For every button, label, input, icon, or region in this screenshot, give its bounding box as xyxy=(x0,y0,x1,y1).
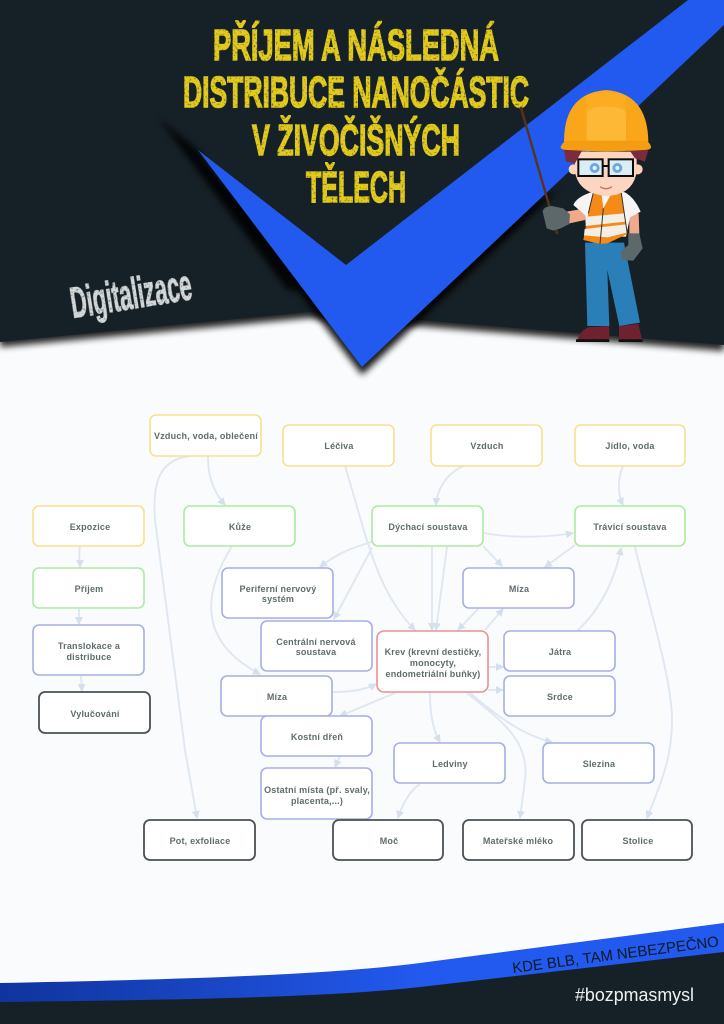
node: Míza upper xyxy=(463,568,574,608)
title xyxy=(183,20,529,212)
node: Krev: endometriální buňky) xyxy=(385,669,481,679)
node: Krev: monocyty, xyxy=(410,658,456,668)
node: Trávicí soustava: Trávicí soustava xyxy=(593,522,667,532)
character: worker with pointer xyxy=(521,90,651,342)
node: Periferní nervový systém: systém xyxy=(262,594,294,604)
node: Centrální nervová soustava: Centrální nervová xyxy=(276,637,357,647)
node: Moč: Moč xyxy=(380,836,398,846)
node: Expozice xyxy=(33,506,144,546)
node: Periferní nervový systém: Periferní nervový xyxy=(240,584,316,594)
node: Jídlo, voda: Jídlo, voda xyxy=(605,441,655,451)
node: Vzduch: Vzduch xyxy=(470,441,504,451)
title: V ŽIVOČIŠNÝCH xyxy=(252,114,460,165)
node: Ostatní místa xyxy=(261,768,372,819)
node: Míza upper: Míza xyxy=(509,584,530,594)
node: Vzduch xyxy=(431,425,542,466)
node: Slezina: Slezina xyxy=(583,759,616,769)
title: PŘÍJEM A NÁSLEDNÁ xyxy=(213,20,499,70)
boots xyxy=(577,324,642,341)
node: Translokace a distribuce xyxy=(33,625,144,675)
node: Ledviny: Ledviny xyxy=(432,759,468,769)
footer band xyxy=(0,923,724,1024)
node: Míza lower: Míza xyxy=(267,692,288,702)
node: Příjem: Příjem xyxy=(75,584,103,594)
node: Kostní dřeň: Kostní dřeň xyxy=(291,732,343,742)
vest xyxy=(583,191,627,244)
arms xyxy=(567,208,585,224)
node: Srdce xyxy=(504,676,615,716)
slogan: KDE BLB, TAM NEBEZPEČNO xyxy=(511,933,720,977)
hair xyxy=(564,148,648,163)
shirt xyxy=(573,191,641,237)
node: Míza lower xyxy=(221,676,332,716)
node: Centrální nervová soustava: soustava xyxy=(296,647,337,657)
node: Stolice: Stolice xyxy=(623,836,653,846)
node: Dýchací soustava xyxy=(372,506,483,546)
node: Centrální nervová soustava xyxy=(261,621,372,671)
glasses xyxy=(578,159,633,176)
hashtag: #bozpmasmysl xyxy=(575,985,694,1005)
node: Vzduch, voda, oblečení xyxy=(150,415,261,456)
node: Srdce: Srdce xyxy=(547,692,573,702)
node: Periferní nervový systém xyxy=(222,568,333,618)
face xyxy=(575,152,637,196)
node: Krev: Krev (krevní destičky, xyxy=(385,647,481,657)
node: Ostatní místa: placenta,...) xyxy=(291,796,343,806)
blue check mark xyxy=(158,0,724,375)
node: Játra: Játra xyxy=(549,647,572,657)
node: Ostatní místa: Ostatní místa (př. svaly, xyxy=(264,785,370,795)
node: Translokace a distribuce: Translokace a xyxy=(58,641,121,651)
title: TĚLECH xyxy=(306,162,406,212)
node: Dýchací soustava: Dýchací soustava xyxy=(388,522,468,532)
node: Vzduch, voda, oblečení: Vzduch, voda, oblečení xyxy=(154,431,258,441)
gloves xyxy=(543,206,570,231)
node: Ledviny xyxy=(394,743,505,783)
ears xyxy=(569,164,579,174)
node: Trávicí soustava xyxy=(575,506,685,546)
node: Slezina xyxy=(543,743,654,783)
node: Příjem xyxy=(33,568,144,608)
node: Kůže: Kůže xyxy=(229,522,251,532)
node: Léčiva: Léčiva xyxy=(324,441,354,451)
hard hat xyxy=(564,90,648,143)
header dark panel xyxy=(0,0,724,351)
node: Pot, exfoliace: Pot, exfoliace xyxy=(170,836,230,846)
node: Stolice xyxy=(582,820,692,860)
node: Vylučování xyxy=(39,692,150,733)
node: Kostní dřeň xyxy=(261,716,372,756)
node: Mateřské mléko: Mateřské mléko xyxy=(483,836,553,846)
mouth xyxy=(600,187,612,189)
label: Digitalizace: Digitalizace xyxy=(67,260,195,328)
node: Mateřské mléko xyxy=(463,820,574,860)
node: Pot, exfoliace xyxy=(144,820,255,860)
node: Moč xyxy=(333,820,443,860)
node: Expozice: Expozice xyxy=(70,522,110,532)
pointer stick xyxy=(521,107,557,234)
node: Jídlo, voda xyxy=(575,425,685,466)
node: Krev xyxy=(377,631,488,692)
node: Játra xyxy=(504,631,615,671)
trousers xyxy=(585,243,640,326)
flow arrows xyxy=(79,456,672,818)
node: Kůže xyxy=(184,506,295,546)
node: Vylučování: Vylučování xyxy=(70,709,120,719)
node: Léčiva xyxy=(283,425,394,466)
node: Translokace a distribuce: distribuce xyxy=(66,652,112,662)
